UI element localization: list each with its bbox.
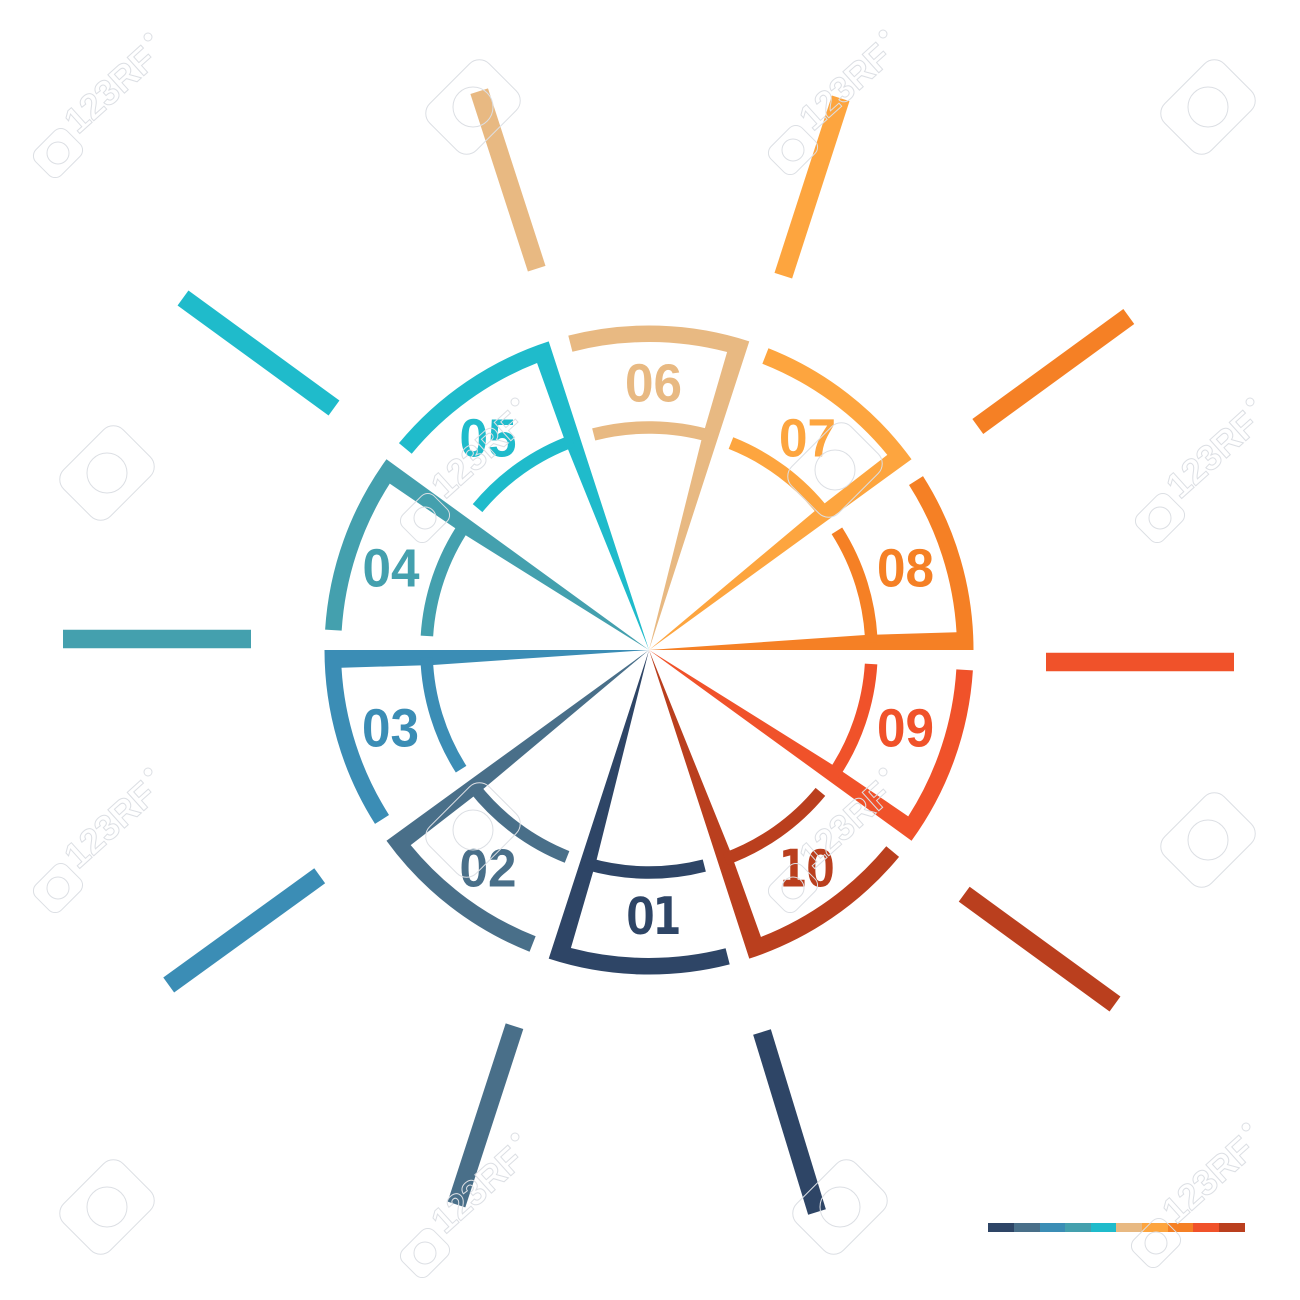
bar 08 [978,316,1129,426]
segment 10: 0 [806,838,835,899]
segment 10 [649,596,915,959]
segment 01: 1 [653,887,681,947]
bar 07 [783,98,841,276]
colour legend strip [988,1223,1245,1232]
radiating bars around the wheel [63,91,1234,1212]
segment 05 [383,341,649,704]
segment 09 [649,509,1014,841]
bar 04 [63,630,251,648]
segment 08 [649,476,974,650]
segment 02 [386,650,751,981]
watermarks: 123RF [56,38,164,141]
segment 03 [324,650,649,824]
segment 09: 09 [877,698,934,758]
segment 06 [484,288,749,650]
watermarks: 123RF [56,773,164,876]
segment 03: 03 [362,698,419,758]
segment 10: 1 [779,839,807,900]
bar 09 [1046,653,1234,671]
bar 03 [169,876,320,985]
watermarks: 123RF [1154,1128,1262,1231]
bar 10 [964,894,1115,1004]
segment 01: 0 [626,886,655,946]
segment 07 [547,319,912,650]
bar 01 [762,1032,817,1212]
segment 04: 04 [362,538,420,598]
segment 04 [284,459,649,791]
wheel of ten segments [284,288,1014,1012]
segment 06: 06 [625,354,682,414]
segment 02: 02 [460,838,516,898]
segment 08: 08 [877,538,934,598]
watermarks: 123RF [423,1138,531,1241]
watermarks: 123RF [791,35,899,138]
watermarks: 123RF [423,403,531,506]
segment 05: 05 [460,408,516,468]
watermarks: 123RF [1158,403,1266,506]
bar 05 [183,298,334,408]
segment 07: 07 [779,408,836,468]
bar 06 [479,91,537,269]
segment 01 [549,650,814,1012]
bar 02 [456,1026,514,1204]
watermarks: 123RF [791,773,899,876]
